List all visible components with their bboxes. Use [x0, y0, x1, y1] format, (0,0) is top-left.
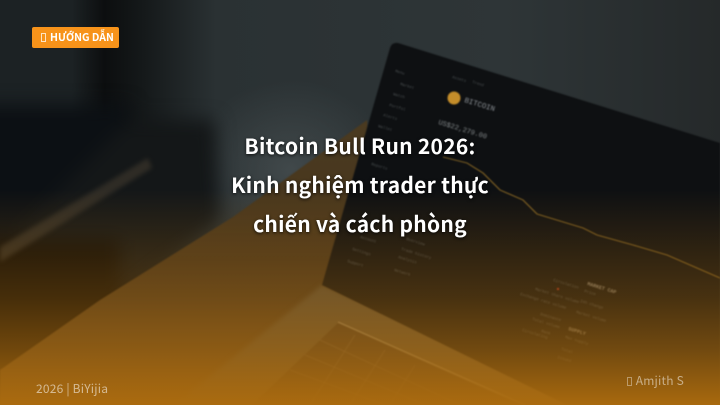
screen content: Circulation: [552, 278, 580, 291]
screen content: Market volume: [575, 310, 607, 324]
laptop screen: [322, 43, 720, 405]
title: chiến và cách phòng: [253, 209, 467, 239]
coin icon: [448, 92, 460, 104]
screen content: Total: [560, 347, 574, 356]
screen content: Trade history: [400, 247, 432, 261]
screen content: Circulating: [521, 328, 549, 341]
screen content: Issued: [556, 355, 572, 364]
title: [231, 131, 489, 240]
screen content: Network: [393, 268, 412, 278]
badge: guide label: [32, 27, 119, 48]
screen content: Menu: [394, 70, 405, 77]
screen content: Account: [359, 236, 377, 245]
dark furniture at left: [0, 105, 220, 390]
screen content: Support: [346, 259, 364, 269]
screen content: Total volume: [531, 317, 561, 331]
screen content: [346, 70, 720, 364]
desk: [0, 120, 400, 405]
screen content: Market: [399, 82, 415, 91]
screen content: Reports: [370, 162, 389, 172]
screen content: 24h change: [579, 299, 604, 311]
screen content: Settings: [351, 247, 372, 258]
footer: year and source: 2026 | BiYijia: [36, 380, 108, 397]
laptop base: [175, 285, 600, 405]
screen content: Rank: [540, 329, 552, 337]
title: Bitcoin Bull Run 2026:: [244, 131, 476, 161]
badge: guide label: HƯỚNG DẪN: [50, 30, 114, 45]
screen content: BITCOIN: [463, 97, 496, 114]
screen content: Market share volume: [534, 287, 580, 305]
screen content: Exchange rate volume: [519, 292, 567, 311]
diagonal bench bar at left: [0, 158, 152, 262]
screen content: Wallet: [377, 124, 393, 133]
screen content: Price: [583, 289, 597, 298]
screen content: MARKET CAP: [586, 281, 617, 296]
screen content: Dominance: [539, 312, 562, 323]
footer: photo credit: Amjith S: [636, 372, 684, 389]
screen content: Overview: [405, 237, 426, 248]
screen content: Analysis: [397, 255, 418, 266]
screen content: Assets: [451, 76, 467, 84]
keyboard: [252, 322, 525, 405]
price chart line: [443, 157, 720, 278]
screen content: US$22,279.00: [437, 119, 488, 142]
screen content: Trend: [471, 80, 485, 89]
screen content: Portfol: [388, 103, 407, 113]
screen content: Max supply: [564, 335, 589, 347]
screen content: SUPPLY: [567, 326, 586, 337]
title: Kinh nghiệm trader thực: [231, 170, 489, 200]
screen content: Watch: [392, 92, 406, 101]
screen content: Alerts: [382, 113, 398, 122]
